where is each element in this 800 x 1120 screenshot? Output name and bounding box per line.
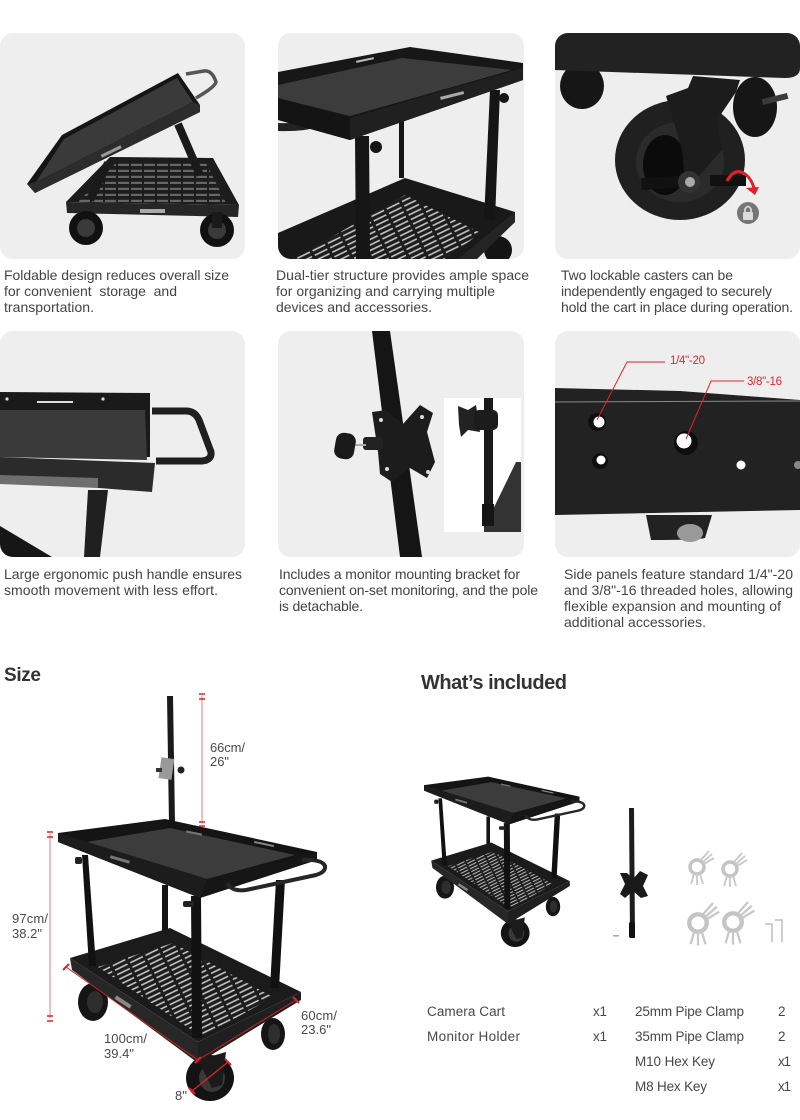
- row: 35mm Pipe Clamp: 2: [778, 1029, 786, 1044]
- dimension: wheel: [189, 1059, 231, 1094]
- side panel: [555, 388, 800, 515]
- panel: foldable design photo: [0, 33, 245, 259]
- row: Monitor Holder: [427, 1029, 607, 1044]
- dual-tier: upper tray: [278, 47, 523, 140]
- label: 100cm/39.4": 39.4": [104, 1046, 134, 1061]
- foldable cart: tilted upper tray: [27, 71, 216, 193]
- included: monitor holder: [613, 808, 648, 938]
- label: 97cm/38.2": 38.2": [12, 926, 42, 941]
- caption: monitor bracket: convenient on-set monitoring, and the pole: [279, 582, 538, 598]
- callout: 1/4"-20: 1/4"-20: [670, 355, 705, 367]
- dimension: total height: [47, 832, 53, 1021]
- top platform: [555, 33, 800, 78]
- caption: casters: hold the cart in place during operation.: [561, 299, 793, 315]
- lock icon: [737, 202, 759, 224]
- lower tray corner: [0, 526, 52, 557]
- bracket below: [646, 515, 712, 542]
- panel: lockable caster photo: [555, 33, 800, 259]
- caption: threaded holes: and 3/8"-16 threaded holes, allowing: [564, 582, 793, 598]
- handle bar: [152, 411, 211, 461]
- caption: foldable design: for convenient storage and: [4, 283, 177, 299]
- caption: dual-tier: Dual-tier structure provides ample space: [276, 267, 529, 283]
- cart body: [58, 819, 325, 1101]
- caption: casters: independently engaged to securely: [561, 283, 772, 299]
- caption: foldable design: Foldable design reduces overall size: [4, 267, 229, 283]
- row: 35mm Pipe Clamp: 35mm Pipe Clamp: [635, 1029, 744, 1044]
- monitor pole: [156, 696, 184, 824]
- dual-tier: handle: [278, 123, 310, 132]
- panel: monitor bracket photo: [278, 331, 524, 557]
- label: 66cm/26": 66cm/: [210, 740, 245, 755]
- size diagram: cart with monitor pole: [58, 696, 325, 1101]
- included: pipe clamps 25mm: [690, 851, 747, 887]
- callout: 3/8"-16: 3/8"-16: [747, 376, 782, 388]
- dual-tier: lower tray with slots: [278, 178, 515, 264]
- caption: push handle: smooth movement with less effort.: [4, 582, 218, 598]
- tray end: [0, 392, 155, 492]
- rail line: [555, 401, 800, 402]
- caption: monitor bracket: is detachable.: [279, 598, 363, 614]
- heading: What's included: What’s included: [421, 672, 567, 694]
- caption: threaded holes: additional accessories.: [564, 614, 706, 630]
- label: 60cm/23.6": 23.6": [301, 1022, 331, 1037]
- row: 25mm Pipe Clamp: 2: [778, 1004, 786, 1019]
- dimension: width: [198, 997, 299, 1060]
- included: hex keys: [765, 920, 782, 942]
- caption: push handle: Large ergonomic push handle ensures: [4, 566, 242, 582]
- caption: threaded holes: flexible expansion and mounting of: [564, 598, 781, 614]
- row: Camera Cart: [427, 1004, 607, 1019]
- holes: [588, 413, 800, 470]
- included: camera cart: [424, 777, 584, 947]
- panel: threaded holes photo: [555, 331, 800, 557]
- caption: threaded holes: Side panels feature standard 1/4"-20: [564, 566, 793, 582]
- row: Camera Cart: Camera Cart: [427, 1004, 505, 1019]
- callout: 1/4"-20: [597, 355, 705, 420]
- row: 25mm Pipe Clamp: 25mm Pipe Clamp: [635, 1004, 744, 1019]
- label: 100cm/39.4": 100cm/: [104, 1031, 147, 1046]
- row: Camera Cart: x1: [593, 1004, 607, 1019]
- main caster wheel: [615, 76, 746, 220]
- red rotation arrow: [727, 172, 759, 195]
- label: 60cm/23.6": 60cm/: [301, 1008, 337, 1023]
- rear wheels: [560, 63, 788, 137]
- caption: dual-tier: for organizing and carrying multiple: [276, 283, 495, 299]
- heading: Size: Size: [4, 665, 41, 686]
- callout: 3/8"-16: [686, 376, 782, 439]
- strut: [84, 490, 108, 557]
- label: 8": 8": [175, 1088, 187, 1103]
- parts list: [427, 1004, 791, 1094]
- row: M8 Hex Key: M8 Hex Key: [635, 1079, 707, 1094]
- inset photo: [444, 398, 521, 532]
- label: 97cm/38.2": 97cm/: [12, 911, 48, 926]
- caption: foldable design: transportation.: [4, 299, 94, 315]
- caption: casters: Two lockable casters can be: [561, 267, 733, 283]
- dimension: pole height: [199, 694, 205, 826]
- row: M10 Hex Key: x1: [778, 1054, 791, 1069]
- pole: [372, 331, 422, 557]
- row: M8 Hex Key: x1: [778, 1079, 791, 1094]
- row: M10 Hex Key: M10 Hex Key: [635, 1054, 715, 1069]
- row: Monitor Holder: x1: [593, 1029, 607, 1044]
- mounting plate and knob: [333, 405, 435, 482]
- label: 66cm/26": 26": [210, 754, 229, 769]
- dimension: length: [63, 964, 201, 1063]
- panel: push handle photo: [0, 331, 245, 557]
- caption: monitor bracket: Includes a monitor mounting bracket for: [279, 566, 520, 582]
- row: M10 Hex Key: [635, 1054, 791, 1069]
- dual-tier: legs: [355, 90, 509, 259]
- foldable cart: struts: [90, 124, 200, 200]
- caption: dual-tier: devices and accessories.: [276, 299, 432, 315]
- foldable cart: lower tray: [66, 157, 239, 247]
- panel: dual-tier photo: [278, 33, 524, 264]
- row: M8 Hex Key: [635, 1079, 791, 1094]
- included: pipe clamps 35mm: [689, 902, 754, 946]
- row: Monitor Holder: Monitor Holder: [427, 1029, 520, 1044]
